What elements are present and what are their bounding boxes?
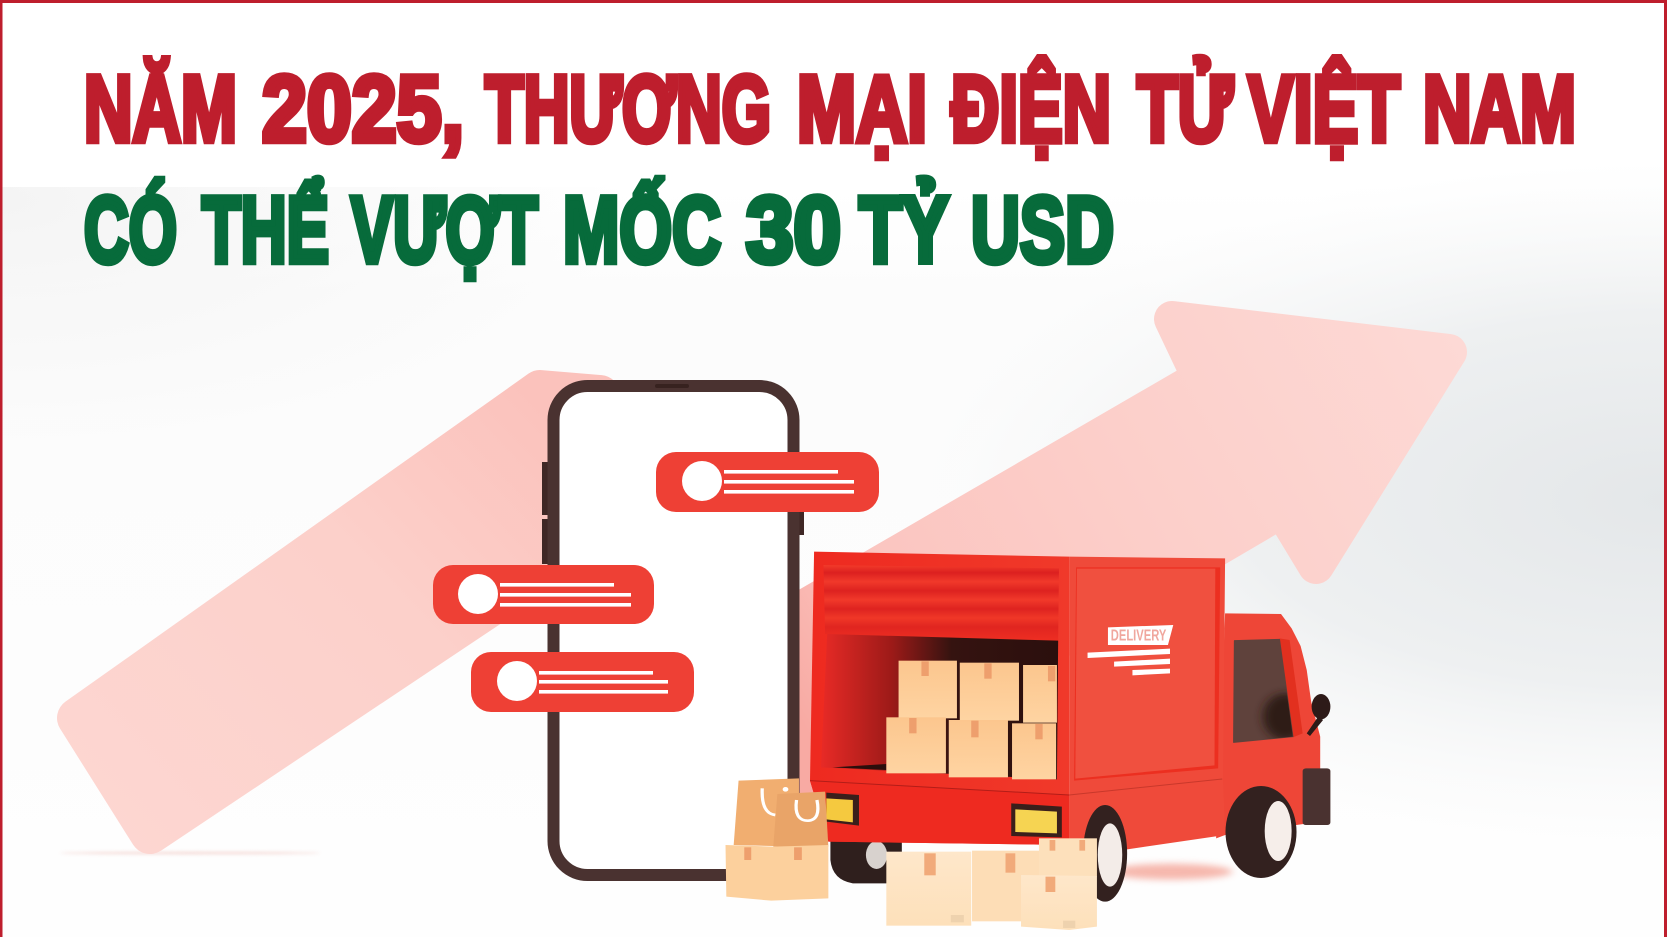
delivery truck <box>726 552 1330 930</box>
ground shadow under left arrow <box>60 852 320 854</box>
title line 2: MỐC <box>563 177 721 282</box>
title line 1: ĐIỆN <box>951 56 1111 161</box>
truck box side <box>1069 557 1225 849</box>
parcels in truck <box>886 661 1057 779</box>
title line 1: VIỆT <box>1248 56 1400 161</box>
growth arrow: left segment <box>77 390 620 834</box>
parcel front 4 <box>1021 875 1097 930</box>
title <box>84 56 1576 282</box>
truck rear face <box>810 552 1069 845</box>
rear right wheel <box>1083 805 1127 902</box>
chat bubble 1 <box>656 452 879 512</box>
growth arrow: right segment with head <box>790 319 1449 790</box>
cab window <box>1233 638 1294 743</box>
title line 1: NĂM <box>84 56 237 161</box>
side buttons <box>542 462 804 564</box>
parcel front 1 <box>886 852 971 926</box>
title line 2: 30 <box>746 177 841 282</box>
parcel front 3 <box>1039 838 1097 877</box>
title line 2: CÓ <box>84 177 177 282</box>
title line 2: USD <box>971 177 1114 282</box>
right tail light <box>1011 803 1062 837</box>
title line 1: TỬ <box>1137 56 1233 161</box>
phone <box>542 384 804 875</box>
title line 1: THƯƠNG <box>485 56 771 161</box>
chat bubble 3 <box>471 652 694 712</box>
delivery label: DELIVERY <box>1111 626 1167 644</box>
title line 2: VƯỢT <box>351 177 538 282</box>
shopping bags <box>734 778 828 847</box>
front bumper <box>1303 768 1330 825</box>
truck cab <box>1216 613 1330 838</box>
rear left wheel <box>830 840 902 883</box>
parcel front 2 <box>972 851 1041 921</box>
roller shutter <box>823 565 1059 641</box>
chat bubble 2 <box>433 565 654 624</box>
title line 2: TỶ <box>859 177 949 282</box>
title line 2 <box>84 177 1114 282</box>
front wheel <box>1226 786 1297 878</box>
title line 1: 2025, <box>262 56 464 161</box>
phone body <box>554 386 794 875</box>
parcel stack left <box>726 845 828 901</box>
ground shadow <box>1110 864 1232 880</box>
delivery label <box>1088 625 1173 675</box>
cab mirror <box>1307 694 1330 736</box>
window frame <box>1279 638 1303 737</box>
title line 1 <box>84 56 1576 161</box>
cargo opening <box>821 634 1058 779</box>
title line 1: MẠI <box>797 56 927 161</box>
title line 2: THỂ <box>202 177 329 282</box>
title line 1: NAM <box>1423 56 1576 161</box>
speaker notch <box>655 384 689 388</box>
left tail light <box>826 793 859 826</box>
